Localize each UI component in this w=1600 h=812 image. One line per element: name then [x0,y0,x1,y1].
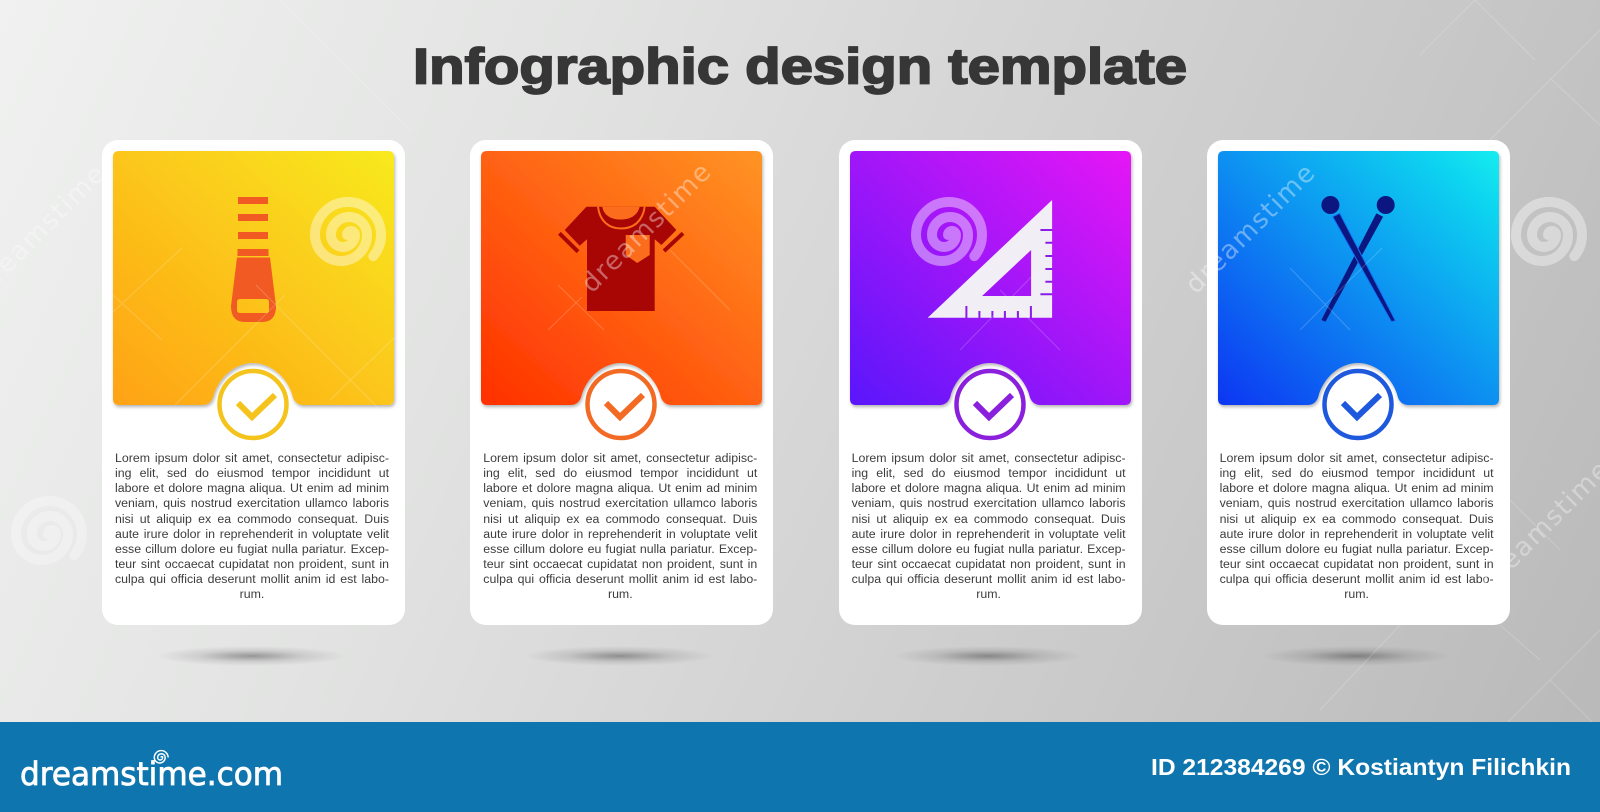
watermark spiral: lower left [16,501,82,560]
text block: aute irure dolor in reprehenderit in voluptate velit [852,527,1126,541]
watermark text: card 4: dreamstime [1180,159,1321,300]
text block [483,451,758,601]
text block: labore et dolore magna aliqua. Ut enim ad minim [852,481,1126,495]
text block [852,451,1126,601]
floor shadows under the cards [156,646,1451,666]
text block: culpa qui officia deserunt mollit anim id est labo- [483,572,757,586]
colour panel [850,151,1131,405]
text block: aute irure dolor in reprehenderit in voluptate velit [483,527,757,541]
check badge [956,371,1023,438]
text block: teur sint occaecat cupidatat non proident, sunt in [1220,557,1494,571]
text block: rum. [1344,587,1369,601]
watermark text: card 2: dreamstime [576,158,717,299]
text block: esse cillum dolore eu fugiat nulla pariatur. Excep- [852,542,1126,556]
text block: nisi ut aliquip ex ea commodo consequat. Duis [483,512,757,526]
panel: card 2 t-shirt [470,140,773,625]
watermark spiral: card 3 [916,202,982,261]
colour panel [113,151,394,405]
text block: ing elit, sed do eiusmod tempor incididunt ut [852,466,1126,480]
colour panel [481,151,762,405]
text block: Lorem ipsum dolor sit amet, consectetur adipisc- [1220,451,1494,465]
text block: Lorem ipsum dolor sit amet, consectetur adipisc- [115,451,389,465]
text block: labore et dolore magna aliqua. Ut enim ad minim [1220,481,1494,495]
text block: veniam, quis nostrud exercitation ullamco laboris [115,496,389,510]
icon: knitting needles [1321,196,1395,322]
text block: culpa qui officia deserunt mollit anim id est labo- [852,572,1126,586]
text block: teur sint occaecat cupidatat non proident, sunt in [483,557,757,571]
text block: teur sint occaecat cupidatat non proident, sunt in [852,557,1126,571]
text block: rum. [240,587,264,601]
text block: esse cillum dolore eu fugiat nulla pariatur. Excep- [115,542,389,556]
text block: culpa qui officia deserunt mollit anim id est labo- [115,572,389,586]
text block: Lorem ipsum dolor sit amet, consectetur adipisc- [483,451,757,465]
check badge [588,371,655,438]
icon: t-shirt [560,207,683,311]
text block: ing elit, sed do eiusmod tempor incididunt ut [1220,466,1494,480]
text block: labore et dolore magna aliqua. Ut enim ad minim [115,481,389,495]
footer bar [0,722,1600,812]
text block [115,451,389,601]
text block: nisi ut aliquip ex ea commodo consequat. Duis [115,512,389,526]
title: Infographic design template [413,38,1187,94]
text block: nisi ut aliquip ex ea commodo consequat. Duis [852,512,1126,526]
text block: rum. [976,587,1001,601]
text block: aute irure dolor in reprehenderit in voluptate velit [1220,527,1494,541]
text block: veniam, quis nostrud exercitation ullamco laboris [1220,496,1494,510]
text block: culpa qui officia deserunt mollit anim id est labo- [1220,572,1494,586]
text block: veniam, quis nostrud exercitation ullamco laboris [483,496,757,510]
text block: veniam, quis nostrud exercitation ullamco laboris [852,496,1126,510]
text block: esse cillum dolore eu fugiat nulla pariatur. Excep- [1220,542,1494,556]
icon: set square [927,200,1052,318]
watermark spiral: card 1 [315,202,381,261]
text block: esse cillum dolore eu fugiat nulla pariatur. Excep- [483,542,757,556]
text block: teur sint occaecat cupidatat non proident, sunt in [115,557,389,571]
text block: aute irure dolor in reprehenderit in voluptate velit [115,527,389,541]
check badge [1324,371,1391,438]
text block: rum. [608,587,633,601]
text block [1220,451,1494,601]
watermark spiral: right edge [1516,202,1582,261]
panel: card 1 zipper [102,140,405,625]
text block: ing elit, sed do eiusmod tempor incididunt ut [115,466,389,480]
check badge [220,371,286,438]
text block: Lorem ipsum dolor sit amet, consectetur adipisc- [852,451,1126,465]
panel: card 4 knitting needles [1207,140,1510,625]
text block: labore et dolore magna aliqua. Ut enim ad minim [483,481,757,495]
footer credit: ID 212384269 © Kostiantyn Filichkin [1151,754,1571,780]
text block: nisi ut aliquip ex ea commodo consequat. Duis [1220,512,1494,526]
text block: ing elit, sed do eiusmod tempor incididunt ut [483,466,757,480]
icon: zipper [231,197,276,322]
colour panel [1218,151,1499,405]
panel: card 3 set square [839,140,1142,625]
footer logo: dreamstime.com [20,755,283,793]
